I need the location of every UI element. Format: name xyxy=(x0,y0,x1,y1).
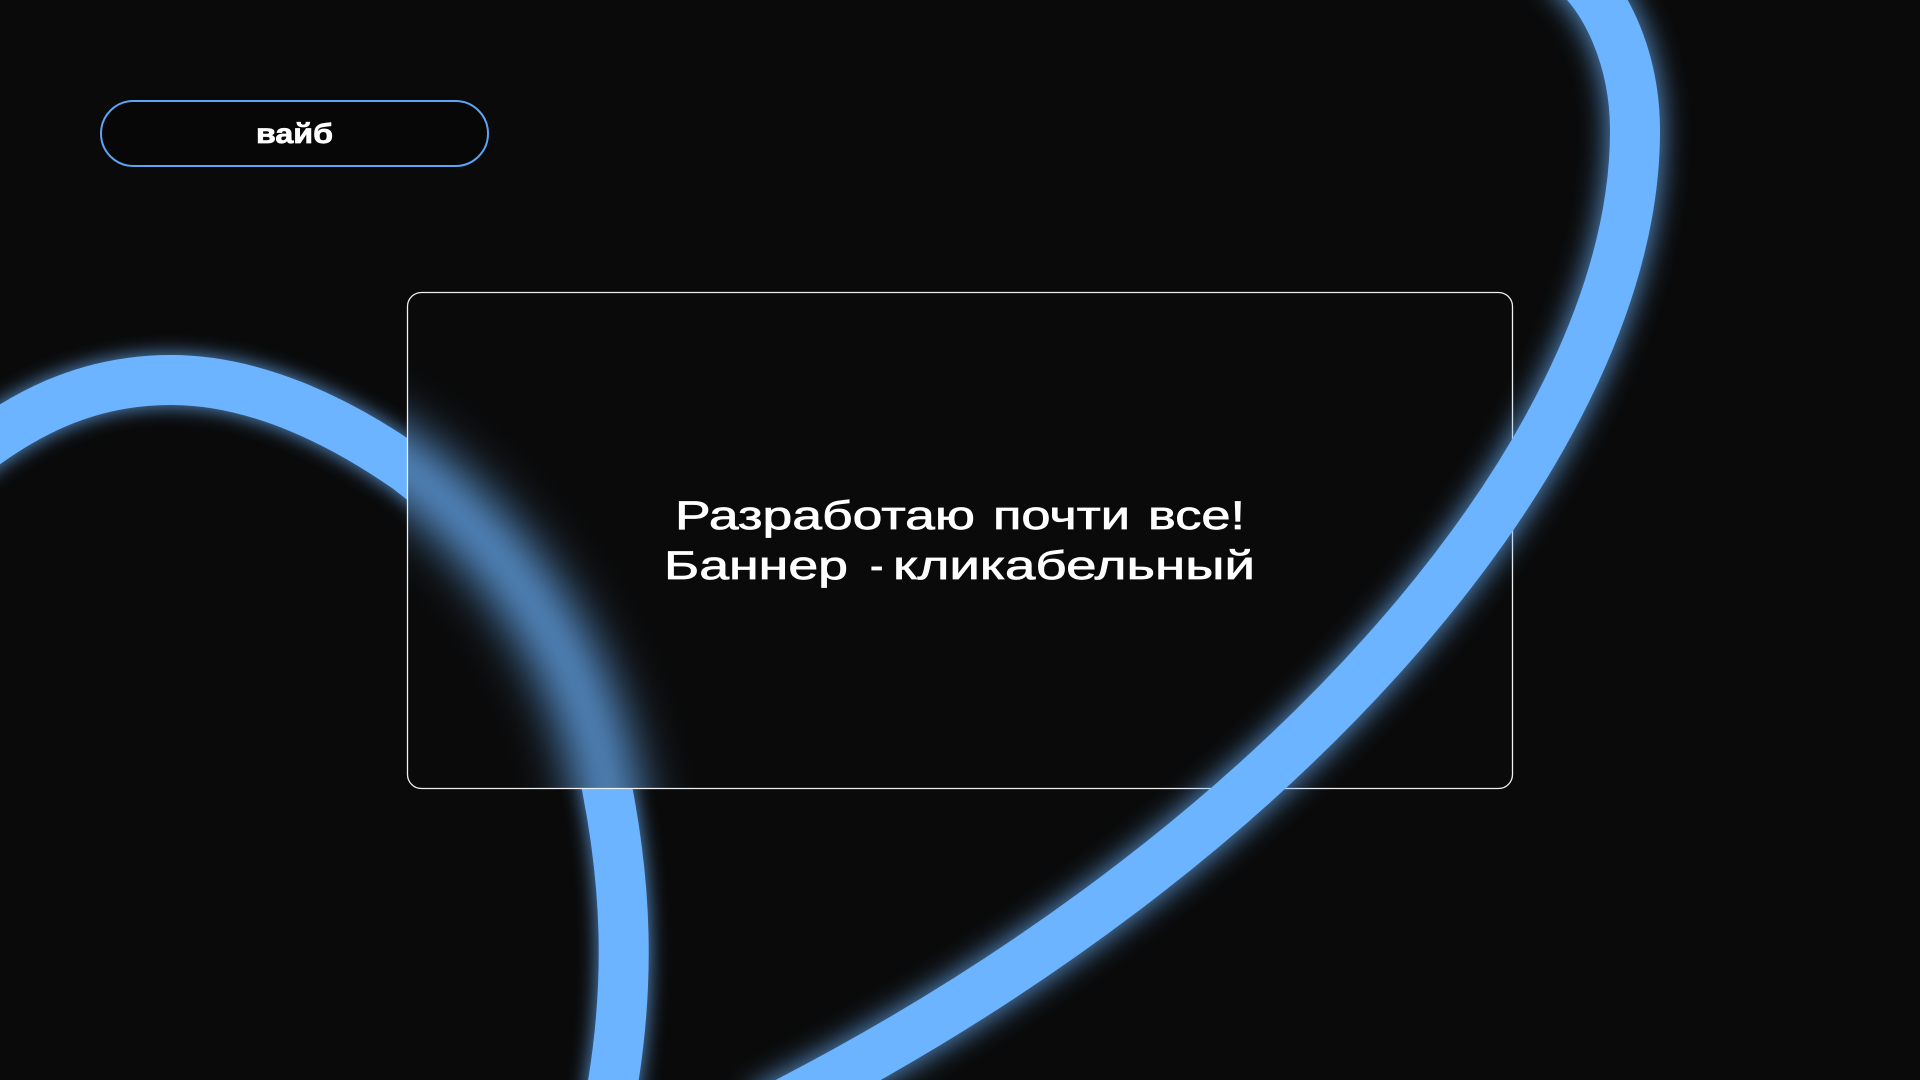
pill tag: вайб: вайб xyxy=(256,118,333,149)
heading text: почти xyxy=(993,494,1130,538)
heading text: - xyxy=(870,544,883,588)
heading text: все! xyxy=(1148,494,1245,538)
heading text: Баннер xyxy=(664,544,848,588)
heading text xyxy=(664,494,1255,588)
left neon curve xyxy=(0,380,624,1080)
pill tag: вайб xyxy=(101,101,488,166)
right neon curve xyxy=(760,0,1635,1080)
heading text: Разработаю xyxy=(675,494,975,538)
glass panel xyxy=(406,292,1514,790)
heading text: кликабельный xyxy=(893,544,1255,588)
